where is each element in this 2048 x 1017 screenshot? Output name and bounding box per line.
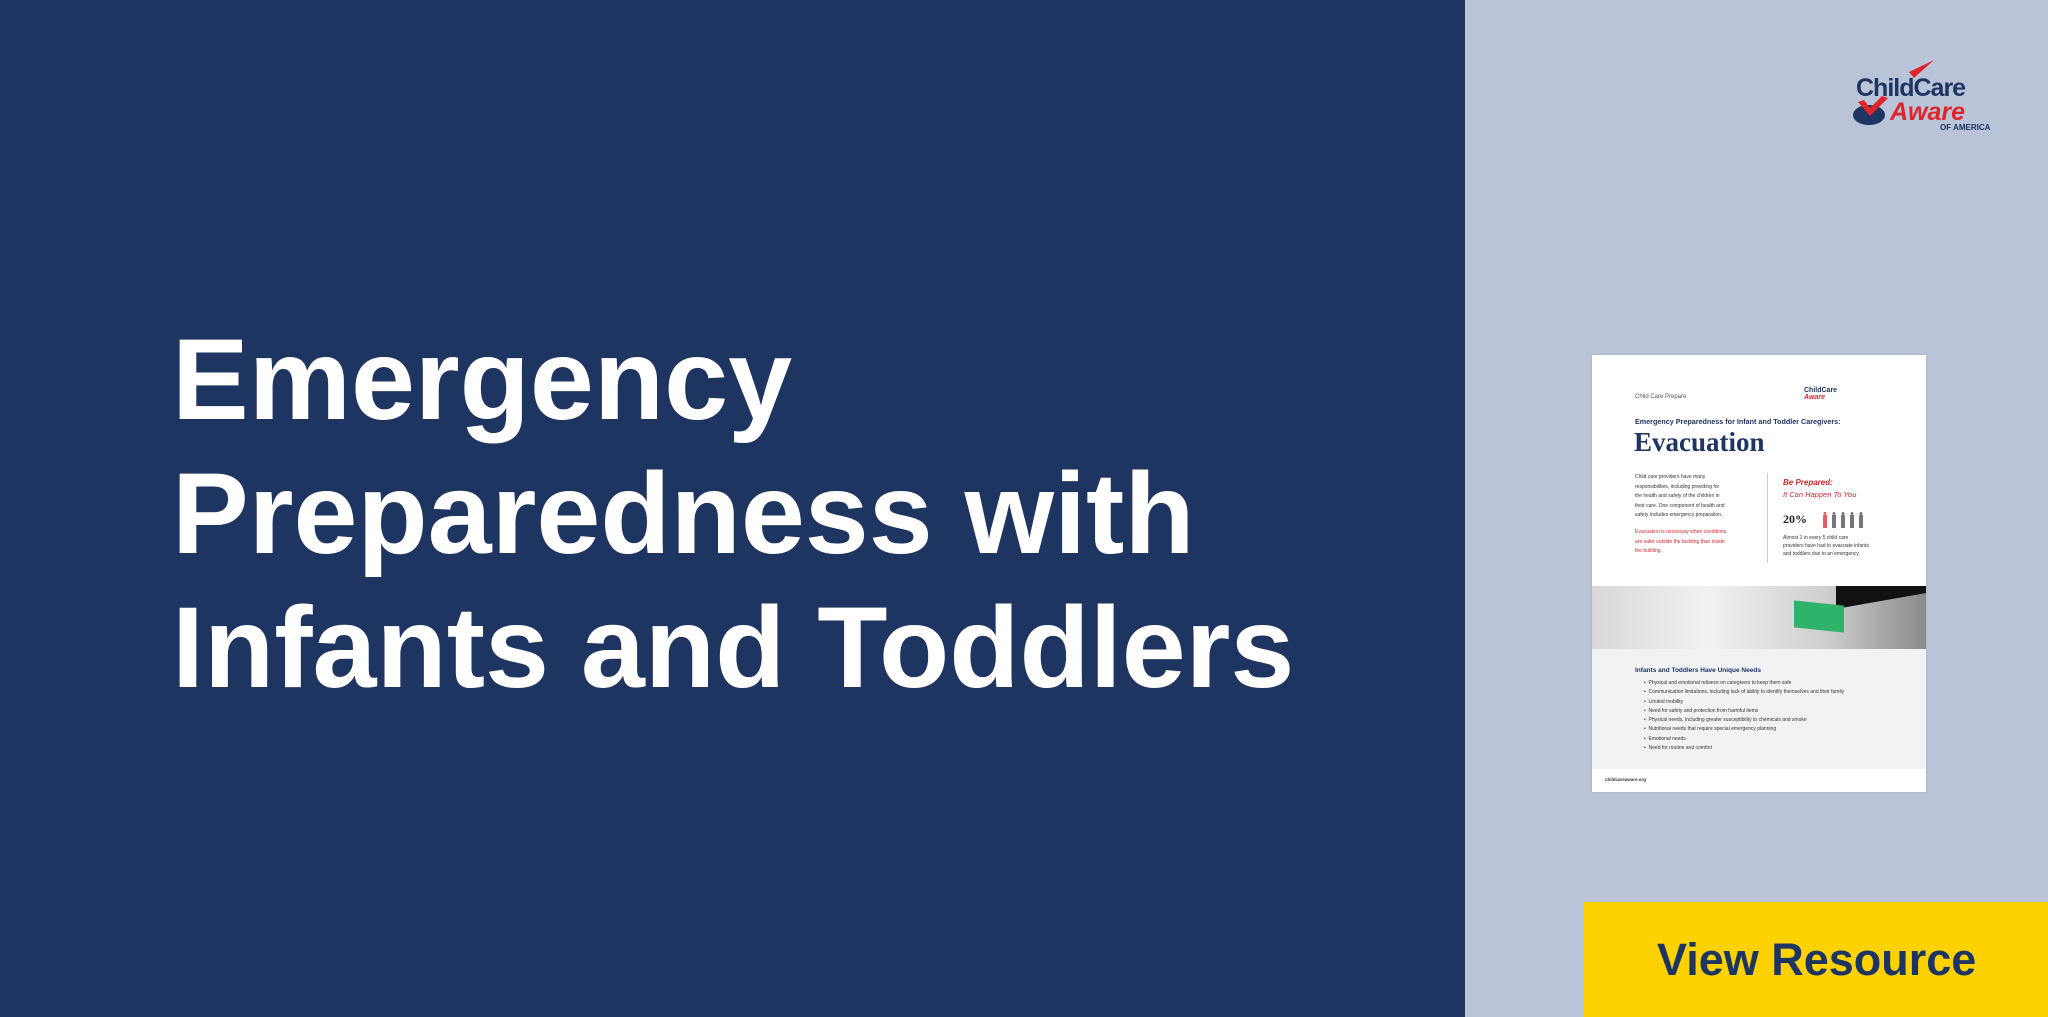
doc intro text — [1635, 474, 1725, 518]
title — [172, 316, 1294, 712]
doc intro text: Child care providers have many — [1635, 474, 1705, 480]
doc needs section: Infants and Toddlers Have Unique Needs — [1635, 667, 1761, 674]
doc red note — [1635, 529, 1726, 554]
doc intro text: safety includes emergency preparation. — [1635, 512, 1722, 518]
left panel — [0, 0, 1465, 1017]
doc needs section: • Need for routine and comfort — [1644, 745, 1712, 751]
doc logo: ChildCare — [1804, 387, 1837, 394]
doc logo: Aware — [1804, 394, 1825, 401]
button: View Resource — [1584, 902, 2048, 1017]
doc intro text: responsibilities, including providing for — [1635, 484, 1719, 490]
doc needs section: • Need for safety and protection from harmful items — [1644, 708, 1758, 714]
logo: Child Care Aware: OF AMERICA — [1940, 123, 1991, 132]
title: Infants and Toddlers — [172, 584, 1294, 712]
document preview: Almost 1 in every 5 child care — [1783, 535, 1848, 541]
doc footer url: childcareaware.org — [1605, 777, 1646, 782]
logo: Child Care Aware: Aware — [1889, 98, 1965, 126]
doc subtitle: Emergency Preparedness for Infant and Toddler Caregivers: — [1635, 417, 1841, 426]
button: View Resource: View Resource — [1657, 934, 1976, 985]
doc red note: the building. — [1635, 548, 1662, 554]
doc needs section: • Limited mobility — [1644, 699, 1683, 705]
icon: people figures — [1823, 512, 1863, 528]
doc heading: Evacuation — [1634, 427, 1765, 457]
doc intro text: their care. One component of health and — [1635, 502, 1725, 508]
doc logo — [1804, 386, 1837, 401]
doc needs section: • Emotional needs — [1644, 736, 1686, 742]
logo: Child Care Aware — [1853, 60, 1991, 132]
logo: Child Care Aware: ChildCare — [1856, 74, 1966, 102]
document preview: and toddlers due to an emergency. — [1783, 551, 1860, 557]
doc photo: exit sign — [1592, 586, 1926, 649]
document preview — [1592, 355, 1926, 792]
doc stat callout: Be Prepared: — [1783, 478, 1833, 487]
doc red note: are safer outside the building than inside — [1635, 538, 1725, 544]
doc needs section: • Communication limitations, including lack of ability to identify themselves and their family — [1644, 689, 1844, 695]
title: Preparedness with — [172, 450, 1195, 578]
doc header label: Child Care Prepare — [1635, 394, 1686, 400]
doc needs section: • Physical needs, including greater susceptibility to chemicals and smoke — [1644, 717, 1807, 723]
doc red note: Evacuation is necessary when conditions — [1635, 529, 1726, 535]
doc needs section: • Nutritional needs that require special emergency planning — [1644, 726, 1776, 732]
document preview: It Can Happen To You — [1783, 490, 1856, 499]
document preview: providers have had to evacuate infants — [1783, 543, 1869, 549]
title: Emergency — [172, 316, 792, 444]
doc needs section — [1592, 649, 1926, 769]
doc intro text: the health and safety of the children in — [1635, 493, 1720, 499]
document preview: 20% — [1783, 512, 1807, 526]
doc needs section: • Physical and emotional reliance on caregivers to keep them safe — [1644, 680, 1791, 686]
